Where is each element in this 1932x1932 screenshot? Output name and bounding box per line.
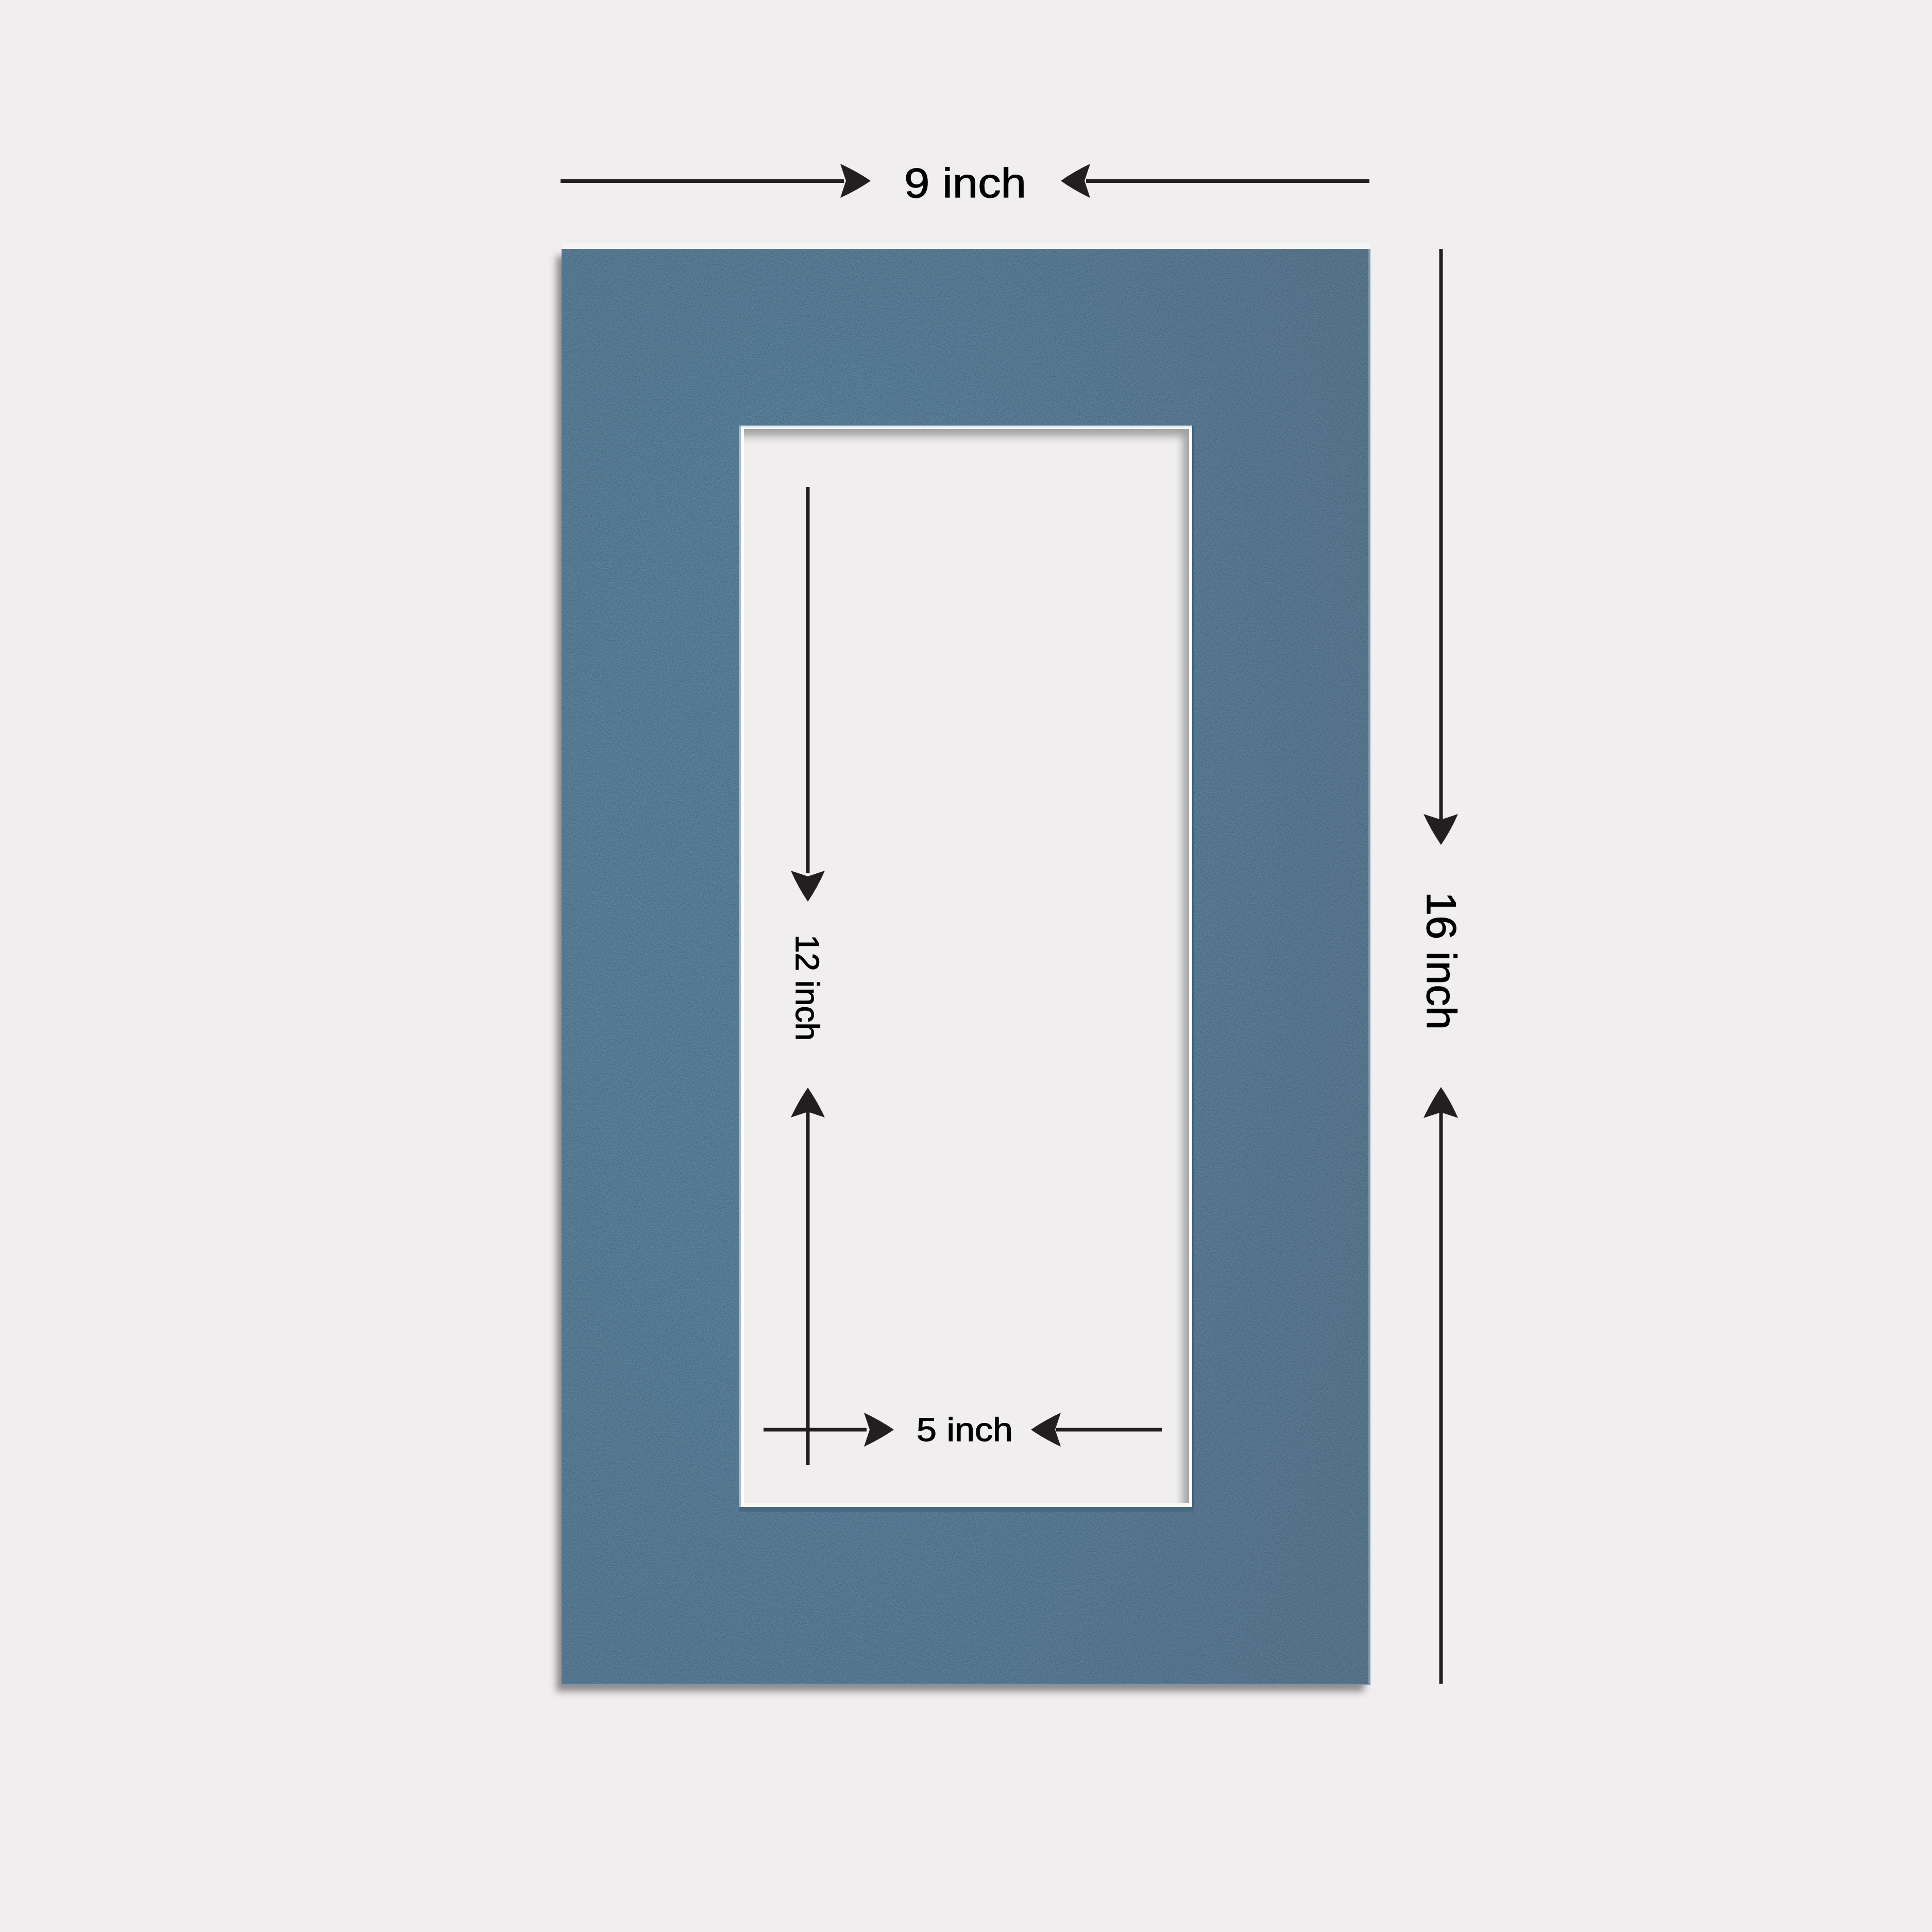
label: 5 inch: 5 inch (917, 1411, 1013, 1448)
white bevel (741, 426, 1192, 1507)
arrow: top width left (561, 164, 871, 198)
label: 9 inch: 9 inch (904, 160, 1026, 207)
arrow: inner width left (764, 1413, 894, 1447)
panel: window opening (739, 426, 1194, 1512)
mat vignette (562, 249, 1370, 1685)
arrow: outer height up (1423, 1087, 1458, 1684)
arrow: inner width right (1031, 1413, 1162, 1447)
inner bottom highlight (744, 1503, 1189, 1507)
arrow: outer height down (1423, 249, 1458, 845)
label: 16 inch: 16 inch (1418, 892, 1464, 1030)
opening interior (744, 429, 1189, 1503)
mat bottom edge highlight (562, 1684, 1370, 1685)
inner shadow (744, 429, 1189, 1503)
arrow: top width right (1061, 164, 1369, 198)
bevel outer edge (739, 426, 1194, 479)
mat top highlight (563, 243, 1370, 249)
mat grain (562, 249, 1370, 1685)
mat drop shadow (556, 256, 1364, 1691)
panel: mat board (556, 243, 1370, 1691)
mat surface (562, 249, 1370, 1685)
arrow: inner height up (791, 1088, 825, 1465)
dimension diagram (551, 164, 1458, 1696)
label: 12 inch: 12 inch (789, 935, 826, 1041)
arrow: inner height down (791, 487, 825, 902)
mat right edge highlight (1368, 249, 1370, 1685)
